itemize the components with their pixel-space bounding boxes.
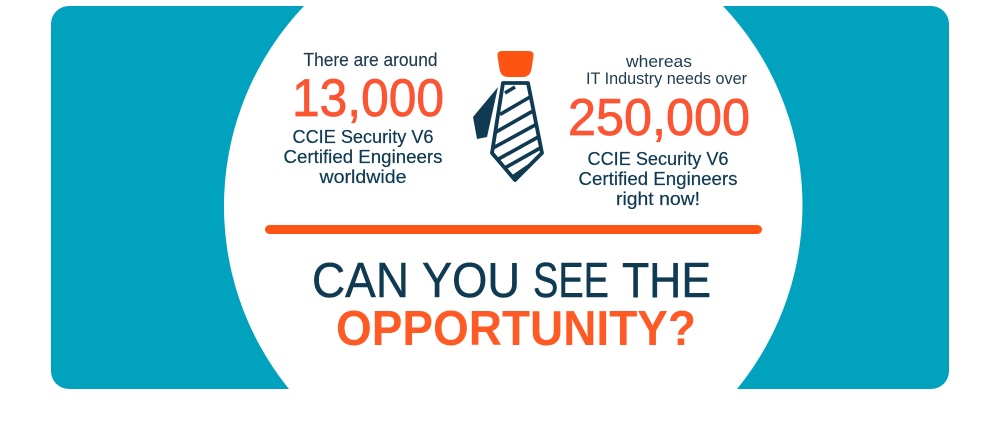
number: 13,000: 13,000 (292, 69, 444, 128)
text block: industry demand: IT Industry needs over (586, 69, 747, 88)
text block: current engineers: CCIE Security V6 (292, 126, 434, 147)
heading: can you see the opportunity: YOU (422, 254, 520, 308)
text block: industry demand: right now! (616, 188, 700, 209)
heading: can you see the opportunity: SEE (533, 254, 609, 308)
text block: industry demand (568, 52, 750, 209)
text block: current engineers (284, 50, 444, 187)
text block: industry demand: Certified Engineers (578, 168, 738, 189)
heading: can you see the opportunity: OPPORTUNITY? (336, 302, 696, 356)
heading: can you see the opportunity: THE (622, 254, 711, 308)
text block: current engineers: There are around (304, 50, 438, 70)
text block: current engineers: worldwide (318, 166, 406, 187)
orange divider bar (265, 225, 762, 234)
text block: industry demand: CCIE Security V6 (588, 148, 728, 169)
number: 250,000: 250,000 (568, 89, 750, 147)
heading: can you see the opportunity: CAN (312, 254, 409, 308)
panel: left teal shape (51, 6, 304, 389)
icon: necktie (473, 51, 542, 180)
panel: right teal shape (723, 6, 949, 389)
text block: industry demand: whereas (625, 52, 692, 71)
heading: can you see the opportunity (312, 254, 711, 356)
text block: current engineers: Certified Engineers (284, 146, 442, 167)
